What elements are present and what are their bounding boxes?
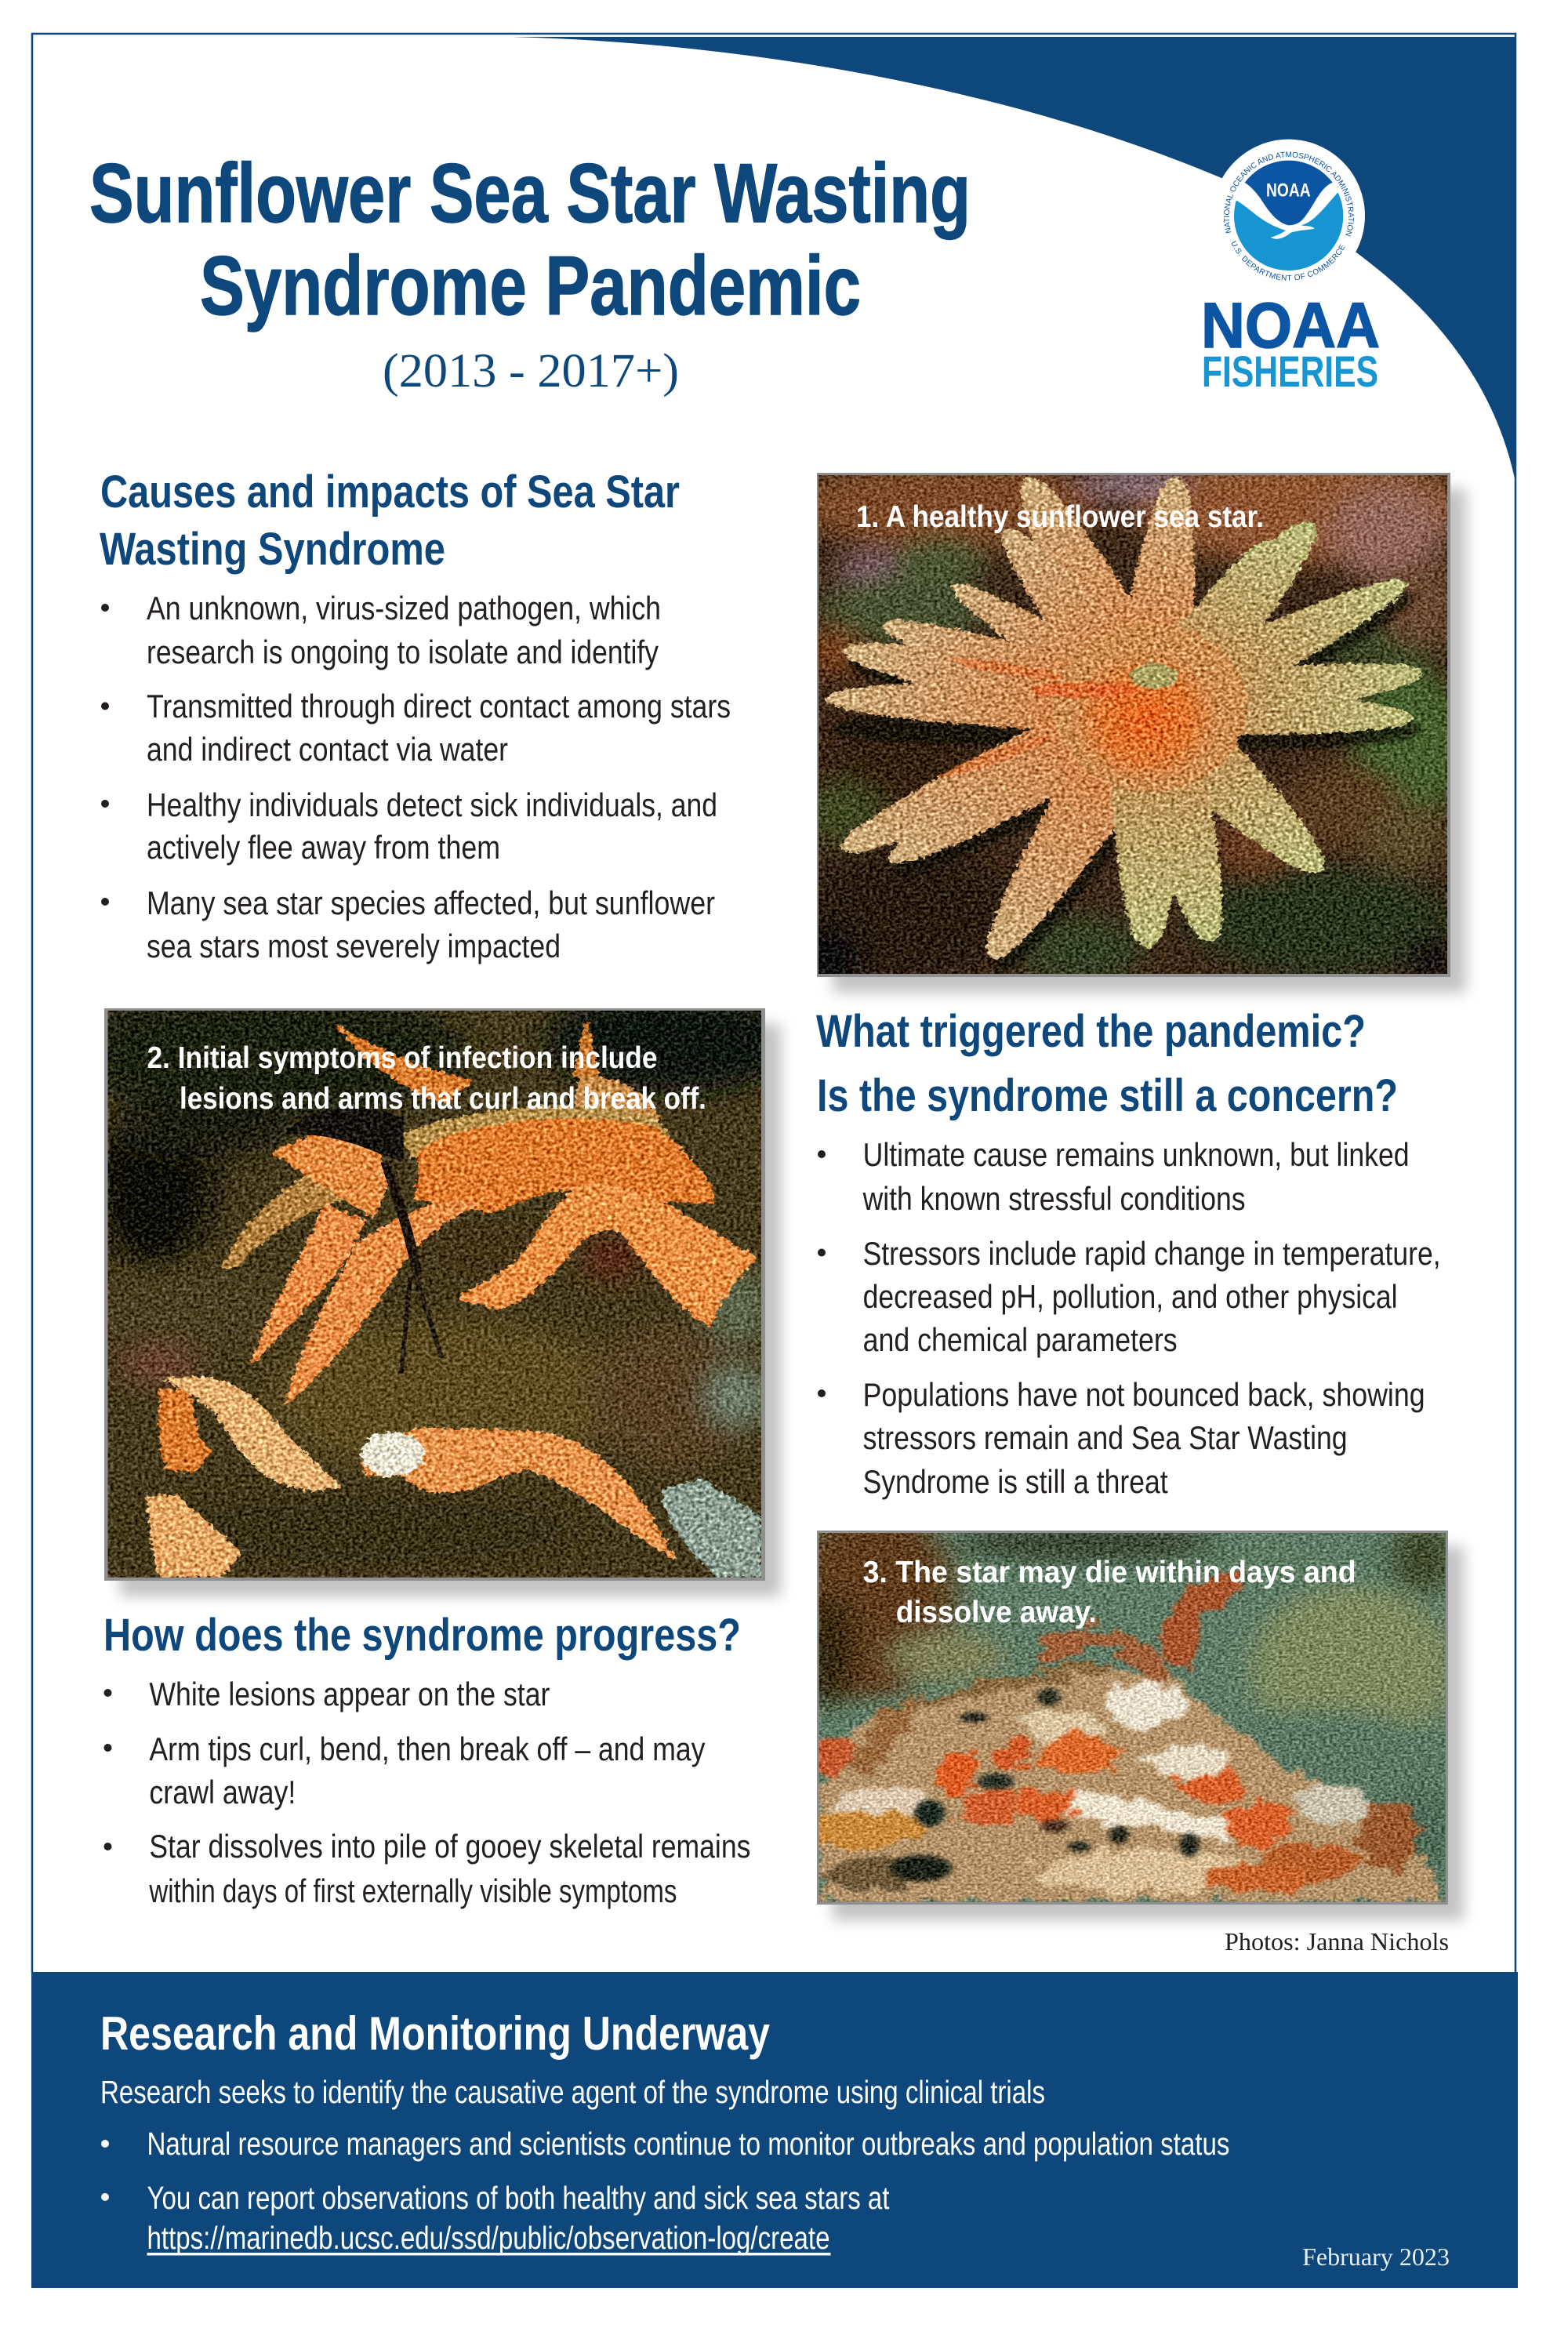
panel: progression <box>103 1610 750 1909</box>
bullet list: progression: crawl away! <box>149 1774 296 1810</box>
page frame <box>32 34 1515 1973</box>
bullet list: progression: within days of first externally visible symptoms <box>149 1872 677 1909</box>
bullet: reporting: https://marinedb.ucsc.edu/ssd/public/observation-log/create <box>147 2220 829 2256</box>
date: February 2023 <box>1302 2242 1450 2271</box>
heading: trigger: Is the syndrome still a concern? <box>817 1070 1398 1121</box>
title <box>89 146 971 332</box>
bullet list: causes: Transmitted through direct contact among stars <box>147 688 731 724</box>
bullet list: trigger: Stressors include rapid change in temperature, <box>863 1235 1441 1272</box>
photo 1: healthy sunflower sea star <box>789 452 1467 995</box>
caption 3 <box>863 1556 1356 1629</box>
photo 2: initial symptoms of infection <box>64 988 797 1596</box>
panel: research and monitoring <box>31 1972 1518 2288</box>
bullet list: trigger: with known stressful conditions <box>862 1180 1246 1217</box>
heading: progression: How does the syndrome progress? <box>103 1610 741 1661</box>
bullet list: trigger: Populations have not bounced back, showing <box>863 1376 1425 1413</box>
subtitle: date range: (2013 - 2017+) <box>383 345 679 398</box>
bullet list: progression: Arm tips curl, bend, then break off – and may <box>149 1730 705 1767</box>
heading: trigger <box>816 1006 1398 1121</box>
research intro: Research seeks to identify the causative agent of the syndrome using clinical trials <box>100 2074 1045 2110</box>
heading: causes: Causes and impacts of Sea Star <box>100 467 680 518</box>
heading: research: Research and Monitoring Underway <box>100 2007 771 2060</box>
bullet list: trigger: and chemical parameters <box>863 1321 1178 1358</box>
bullet list: trigger: stressors remain and Sea Star Wasting <box>863 1419 1348 1456</box>
heading: trigger: What triggered the pandemic? <box>816 1006 1366 1057</box>
bullet list: progression: Star dissolves into pile of gooey skeletal remains <box>149 1828 750 1865</box>
bullet list: causes <box>101 590 731 964</box>
bullet list: progression: White lesions appear on the star <box>149 1676 550 1712</box>
logo: NOAA Fisheries <box>1201 140 1380 396</box>
bullet list: causes: Healthy individuals detect sick individuals, and <box>147 786 717 823</box>
caption 2 <box>147 1041 706 1116</box>
panel: causes and impacts <box>100 467 731 964</box>
bullet list: trigger: Ultimate cause remains unknown, but linked <box>863 1136 1410 1173</box>
caption 3: 3. The star may die within days and <box>863 1556 1356 1589</box>
bullet list: causes: Many sea star species affected, but sunflower <box>147 884 715 921</box>
icon: NOAA seal: NATIONAL OCEANIC AND ATMOSPHERIC ADMINISTRATION <box>1224 152 1354 237</box>
title: Syndrome Pandemic <box>200 238 861 332</box>
bullet list: causes: research is ongoing to isolate and identify <box>147 634 659 670</box>
bullet list: causes: and indirect contact via water <box>147 731 508 768</box>
caption 2: 2. Initial symptoms of infection include <box>147 1041 657 1075</box>
wordmark: FISHERIES: FISHERIES <box>1202 347 1378 396</box>
bullet: monitoring: Natural resource managers and scientists continue to monitor outbreaks and population status <box>147 2126 1229 2162</box>
caption 1: 1. A healthy sunflower sea star. <box>856 500 1264 534</box>
bullet list: causes: sea stars most severely impacted <box>147 928 561 964</box>
caption 3: dissolve away. <box>896 1596 1097 1629</box>
title: Sunflower Sea Star Wasting <box>89 146 971 240</box>
caption 2: lesions and arms that curl and break off. <box>180 1082 706 1116</box>
bullet list: causes: An unknown, virus-sized pathogen, which <box>147 590 661 626</box>
wordmark: NOAA: NOAA <box>1201 290 1380 361</box>
photo 3: star dissolving <box>789 1505 1464 1920</box>
icon: NOAA seal: U.S. DEPARTMENT OF COMMERCE <box>1232 241 1345 281</box>
bullet list: progression <box>103 1676 750 1909</box>
photo credit: Photos: Janna Nichols <box>1225 1927 1449 1956</box>
icon: NOAA seal: NOAA <box>1266 180 1311 202</box>
icon: NOAA seal <box>1221 140 1365 281</box>
bullet list: trigger: Syndrome is still a threat <box>863 1463 1168 1500</box>
heading: causes <box>100 467 680 575</box>
bullet: reporting: You can report observations of both healthy and sick sea stars at <box>147 2180 890 2216</box>
bullet: reporting <box>101 2180 890 2256</box>
bullet list: trigger <box>818 1136 1441 1500</box>
panel: trigger and concern <box>816 1006 1441 1500</box>
header swoosh <box>512 37 1516 486</box>
heading: causes: Wasting Syndrome <box>100 524 445 575</box>
bullet list: causes: actively flee away from them <box>147 829 500 866</box>
bullet list: trigger: decreased pH, pollution, and other physical <box>863 1278 1398 1315</box>
